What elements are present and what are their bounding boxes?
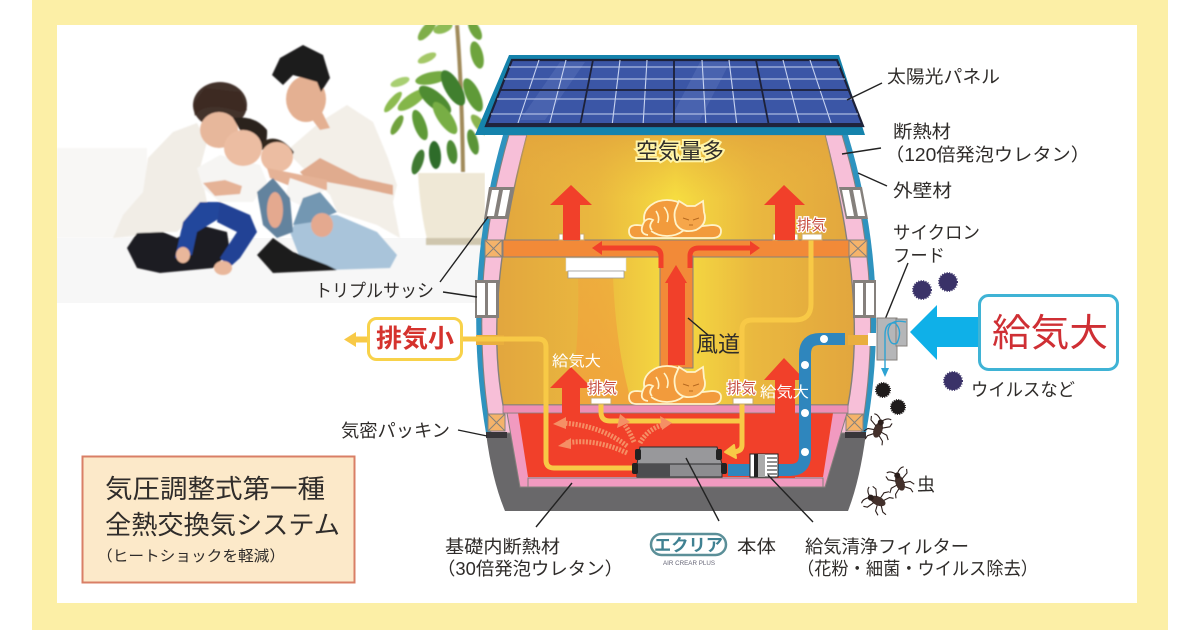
labels: exhaust and supply tags: 排気 [797, 217, 826, 234]
man [257, 45, 400, 273]
woman [113, 82, 247, 273]
arrow: supply air [910, 305, 979, 360]
callout: system name: 全熱交換気システム [105, 510, 340, 540]
curved dashed air [562, 420, 666, 453]
yellow exhaust ducts [365, 238, 811, 468]
vents [559, 234, 822, 404]
insulation [482, 135, 871, 433]
label: viruses etc: ウイルスなど [971, 380, 1075, 400]
label: solar panel: 太陽光パネル [887, 67, 1000, 87]
house diagram [365, 55, 878, 511]
labels: exhaust and supply tags: 排気 [727, 380, 756, 397]
leader lines [440, 83, 908, 527]
label: insects: 虫 [917, 475, 935, 495]
viruses [913, 273, 962, 390]
label: insulation: 断熱材 [893, 122, 951, 142]
logo: air crear plus: エクリア [654, 536, 723, 555]
air conditioner light [570, 277, 632, 404]
callout: system name [82, 456, 354, 582]
ventilation duct band [503, 240, 849, 368]
label: triple sash: トリプルサッシ [315, 281, 434, 301]
label: main unit: 本体 [737, 537, 776, 557]
solar roof [475, 55, 865, 135]
cross braces [485, 240, 867, 431]
label: cyclone hood [893, 223, 980, 266]
ventilation unit [632, 447, 727, 477]
interior [497, 135, 854, 405]
label: foundation insulation [437, 537, 623, 579]
callout: small exhaust: 排気小 [376, 325, 454, 353]
label: air duct: 風道 [696, 332, 740, 357]
label: insulation detail: （120倍発泡ウレタン） [885, 145, 1090, 165]
label: large air volume: 空気量多 [636, 139, 724, 164]
label: foundation insulation: 基礎内断熱材 [445, 537, 560, 557]
labels: exhaust and supply tags [552, 217, 826, 401]
crawl space red air [518, 413, 833, 477]
label: supply filter: （花粉・細菌・ウイルス除去） [797, 559, 1038, 579]
air conditioner [566, 258, 626, 278]
foundation [486, 433, 866, 511]
labels: exhaust and supply tags: 給気大 [760, 384, 809, 401]
red air arrows [550, 185, 805, 478]
label: exterior wall: 外壁材 [893, 181, 952, 201]
crawl space pink lining [507, 413, 847, 487]
plant [383, 25, 485, 246]
label: foundation insulation: （30倍発泡ウレタン） [437, 559, 623, 579]
cats [629, 200, 721, 238]
callout: system name: （ヒートショックを軽減） [97, 548, 285, 565]
labels: exhaust and supply tags: 給気大 [552, 353, 601, 370]
callout: large supply air [980, 296, 1118, 370]
callout: small exhaust [344, 318, 462, 360]
children [175, 118, 337, 275]
label: airtight packing: 気密パッキン [341, 421, 450, 441]
dust particles [876, 383, 905, 414]
callout: large supply air: 給気大 [992, 313, 1108, 355]
logo: air crear plus: AIR CREAR PLUS [663, 561, 715, 567]
room labels [552, 139, 826, 401]
floor slab [503, 405, 848, 413]
label: supply filter [797, 537, 1038, 579]
cyclone hood [877, 318, 907, 377]
windows: triple sash [475, 187, 876, 318]
airtight packing [486, 432, 866, 438]
insects [860, 412, 917, 518]
label: cyclone hood: サイクロン [893, 223, 980, 243]
callout: system name: 気圧調整式第一種 [105, 474, 325, 504]
air filter [750, 454, 778, 477]
logo: air crear plus [651, 534, 726, 567]
label: cyclone hood: フード [893, 246, 945, 266]
label: supply filter: 給気清浄フィルター [805, 537, 969, 557]
wall openings [476, 333, 878, 346]
photo: family with plant [58, 25, 485, 276]
blue supply duct [728, 335, 845, 470]
outer wall [476, 135, 876, 433]
labels: exhaust and supply tags: 排気 [588, 380, 617, 397]
